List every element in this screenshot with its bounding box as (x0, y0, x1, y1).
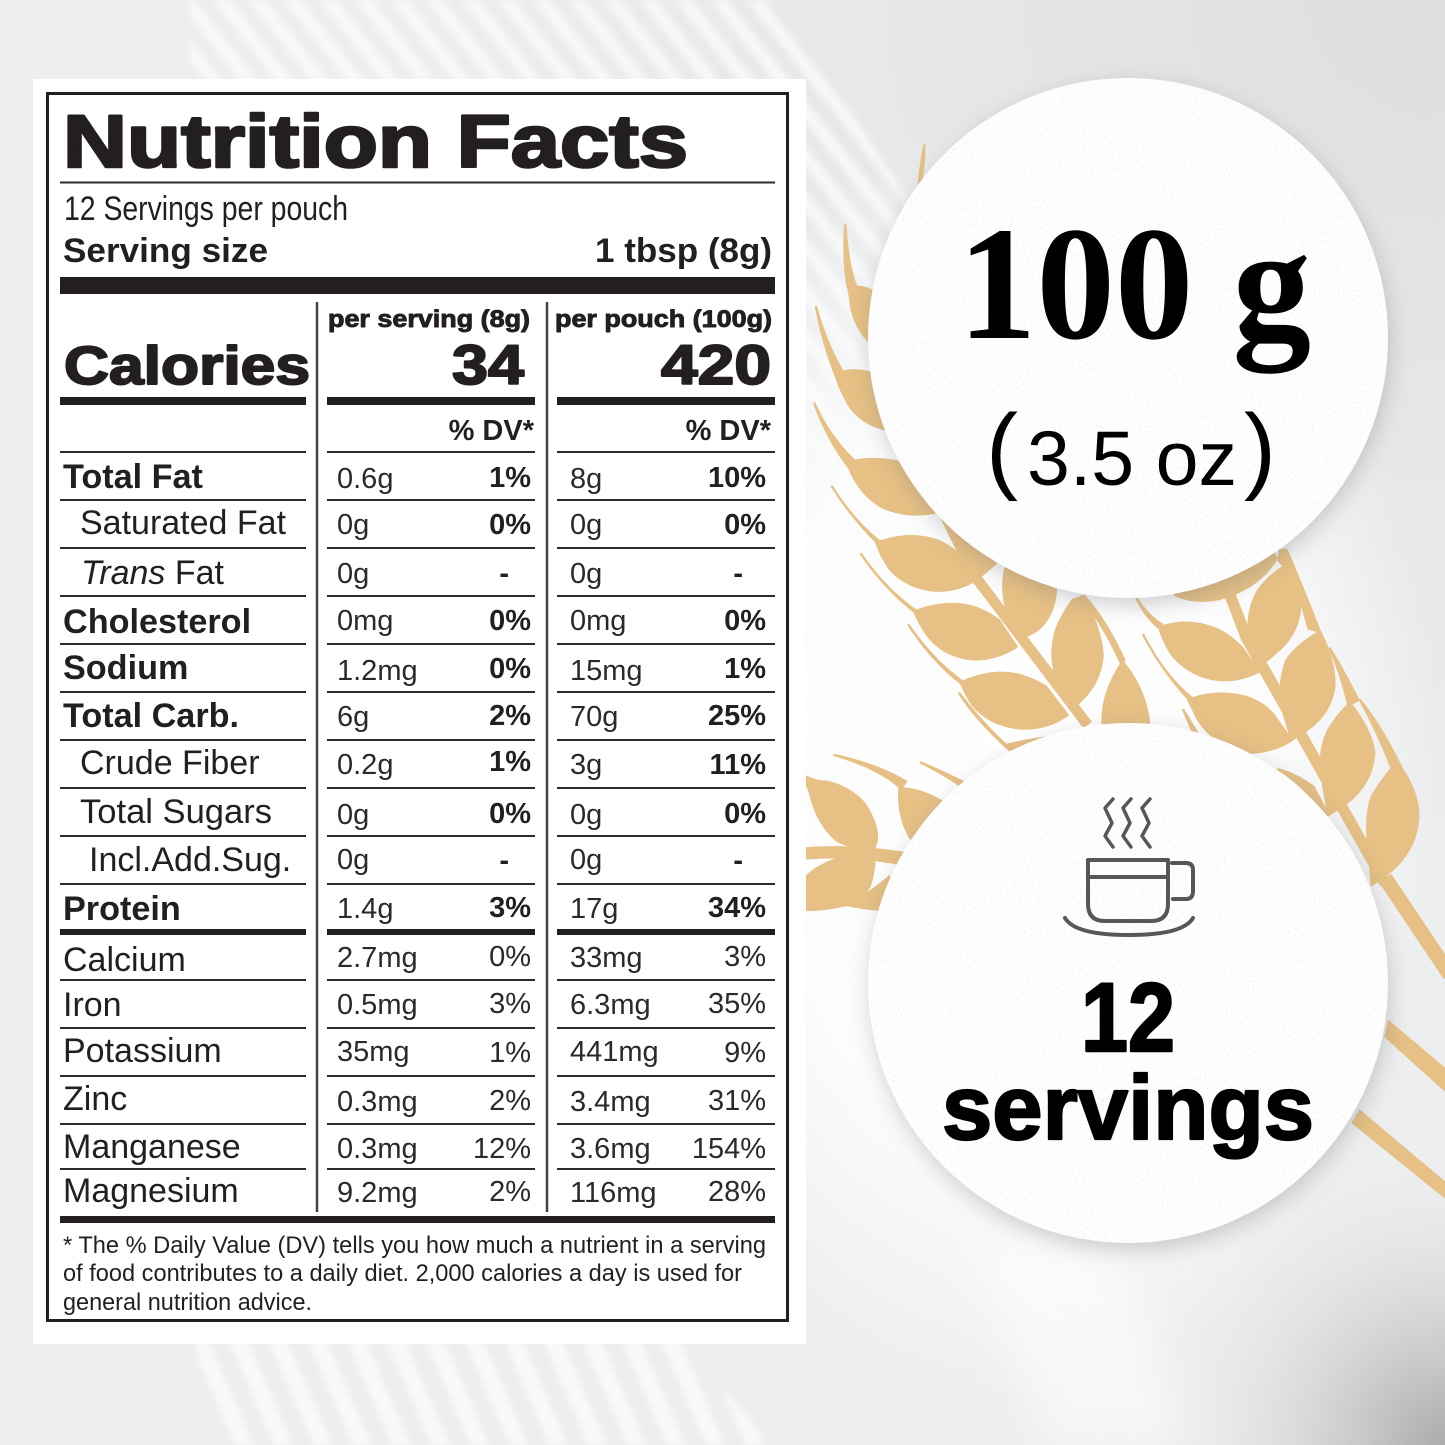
row: potassium: 441mg (570, 1036, 659, 1068)
row: iron: Iron (63, 986, 122, 1024)
wheat stalk: lower left (806, 755, 963, 910)
row: magnesium (63, 1172, 766, 1210)
row: potassium (63, 1032, 766, 1070)
row: incl add sug: - (499, 845, 509, 877)
percent daily value headers: % DV* (686, 415, 772, 447)
row: magnesium: 28% (708, 1176, 766, 1208)
weight in grams: 100 g (958, 195, 1311, 374)
row: sodium: 0% (489, 653, 531, 685)
row: incl add sug (89, 841, 743, 879)
wheat illustration (806, 145, 1445, 1199)
row: calcium: 0% (489, 941, 531, 973)
row: saturated fat: Saturated Fat (80, 504, 287, 542)
weight in ounces: 3.5 oz (1027, 416, 1237, 502)
per pouch header: per pouch (100g) (555, 306, 772, 333)
row: sodium: Sodium (63, 649, 188, 687)
row: magnesium: Magnesium (63, 1172, 239, 1210)
servings per pouch: 12 Servings per pouch (64, 190, 348, 228)
row: incl add sug: Incl.Add.Sug. (89, 841, 291, 879)
row: crude fiber: Crude Fiber (80, 744, 260, 782)
row: manganese: 3.6mg (570, 1133, 651, 1165)
row: zinc: Zinc (63, 1080, 127, 1118)
row: total sugars: Total Sugars (80, 793, 272, 831)
row: calcium (63, 941, 766, 979)
row: crude fiber: 3g (570, 749, 602, 781)
percent daily value headers: % DV* (449, 415, 535, 447)
row: crude fiber: 1% (489, 746, 531, 778)
row: total fat: 0.6g (337, 463, 393, 495)
row: protein: 17g (570, 893, 618, 925)
percent daily value headers (449, 415, 772, 447)
panel: nutrition facts label (33, 79, 806, 1344)
row: total carb: 70g (570, 701, 618, 733)
row: incl add sug: 0g (337, 844, 369, 876)
row: total fat: 10% (708, 462, 766, 494)
row: total sugars: 0g (570, 799, 602, 831)
footnote: * The % Daily Value (DV) tells you how much a nutrient in a serving (63, 1232, 766, 1259)
row: zinc: 3.4mg (570, 1086, 651, 1118)
row: iron: 0.5mg (337, 989, 418, 1021)
row: protein: Protein (63, 890, 181, 928)
row: iron: 35% (708, 988, 766, 1020)
row: protein: 1.4g (337, 893, 393, 925)
row: total carb: 25% (708, 700, 766, 732)
row: total fat (63, 458, 766, 496)
row: manganese: 154% (692, 1133, 766, 1165)
row: potassium: 1% (489, 1037, 531, 1069)
row: zinc: 2% (489, 1085, 531, 1117)
per serving header: 34 (452, 333, 524, 396)
row: calcium: Calcium (63, 941, 186, 979)
row: zinc: 0.3mg (337, 1086, 418, 1118)
row: trans fat (81, 554, 743, 592)
row: iron: 6.3mg (570, 989, 651, 1021)
row: calcium: 2.7mg (337, 942, 418, 974)
row: sodium: 1.2mg (337, 655, 418, 687)
footnote: general nutrition advice. (63, 1289, 312, 1316)
row: total sugars: 0g (337, 799, 369, 831)
row: trans fat: - (733, 558, 743, 590)
row: sodium: 15mg (570, 655, 643, 687)
row: sodium (63, 649, 766, 687)
serving size: 1 tbsp (8g) (595, 232, 772, 270)
servings count: 12 (1081, 963, 1175, 1072)
row: incl add sug: - (733, 845, 743, 877)
row: sodium: 1% (724, 653, 766, 685)
row: crude fiber: 0.2g (337, 749, 393, 781)
row: cholesterol: 0% (489, 605, 531, 637)
row: zinc: 31% (708, 1085, 766, 1117)
row: cholesterol (63, 603, 766, 641)
row: cholesterol: 0mg (337, 605, 393, 637)
row: potassium: 35mg (337, 1036, 410, 1068)
wheat stalk: upper left (814, 145, 1149, 750)
per pouch header (555, 306, 772, 396)
row: crude fiber: 11% (710, 749, 766, 781)
row: crude fiber (80, 744, 766, 782)
row: saturated fat: 0g (570, 509, 602, 541)
row: total sugars: 0% (724, 798, 766, 830)
row: potassium: 9% (724, 1037, 766, 1069)
row: manganese (63, 1128, 766, 1166)
serving size: Serving size (63, 232, 268, 270)
row: magnesium: 2% (489, 1176, 531, 1208)
row: saturated fat: 0g (337, 509, 369, 541)
footnote: of food contributes to a daily diet. 2,000 calories a day is used for (63, 1260, 742, 1287)
row: total sugars (80, 793, 766, 831)
weight in ounces: ) (1244, 395, 1276, 502)
row: protein (63, 890, 766, 928)
row: magnesium: 9.2mg (337, 1177, 418, 1209)
row: cholesterol: 0% (724, 605, 766, 637)
circle: servings (868, 723, 1388, 1248)
row: saturated fat (80, 504, 766, 542)
row: manganese: 12% (473, 1133, 531, 1165)
calories label: Calories (64, 336, 310, 396)
footnote (63, 1232, 766, 1316)
row: calcium: 33mg (570, 942, 643, 974)
servings word: servings (942, 1058, 1314, 1159)
row: total carb: 2% (489, 700, 531, 732)
row: trans fat: 0g (337, 558, 369, 590)
row: iron: 3% (489, 988, 531, 1020)
title: Nutrition Facts (63, 100, 688, 183)
row: calcium: 3% (724, 941, 766, 973)
per pouch header: 420 (661, 333, 771, 396)
icon: steaming cup on saucer (1065, 799, 1193, 935)
row: saturated fat: 0% (489, 509, 531, 541)
row: manganese: Manganese (63, 1128, 241, 1166)
row: cholesterol: Cholesterol (63, 603, 251, 641)
row: protein: 34% (708, 892, 766, 924)
serving size (63, 232, 772, 270)
row: total carb (63, 697, 766, 735)
weight in ounces: ( (986, 395, 1018, 502)
per serving header (328, 306, 530, 396)
row: cholesterol: 0mg (570, 605, 626, 637)
row: saturated fat: 0% (724, 509, 766, 541)
row: magnesium: 116mg (570, 1177, 657, 1209)
circle: net weight (868, 78, 1388, 603)
row: trans fat: Trans Fat (81, 554, 225, 592)
row: total sugars: 0% (489, 798, 531, 830)
row: trans fat: 0g (570, 558, 602, 590)
row: manganese: 0.3mg (337, 1133, 418, 1165)
row: trans fat: - (499, 558, 509, 590)
row: total fat: Total Fat (63, 458, 203, 496)
row: total fat: 1% (489, 462, 531, 494)
row: zinc (63, 1080, 766, 1118)
row: iron (63, 986, 766, 1024)
row: total carb: Total Carb. (63, 697, 239, 735)
wheat stalk: right (1137, 550, 1445, 1199)
row: protein: 3% (489, 892, 531, 924)
row: potassium: Potassium (63, 1032, 222, 1070)
weight in ounces (986, 395, 1276, 502)
row: incl add sug: 0g (570, 844, 602, 876)
row: total fat: 8g (570, 463, 602, 495)
per serving header: per serving (8g) (328, 306, 530, 333)
row: total carb: 6g (337, 701, 369, 733)
